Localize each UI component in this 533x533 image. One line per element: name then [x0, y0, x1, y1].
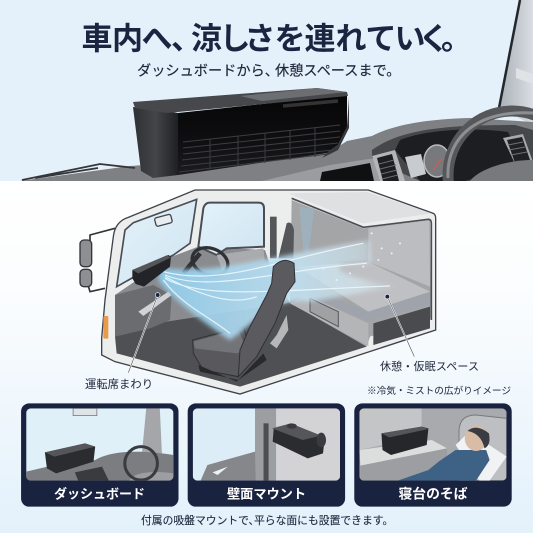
- cooler device: [132, 255, 171, 287]
- floor: [115, 303, 367, 387]
- label: driver area: 運転席まわり: [85, 378, 153, 391]
- footer note: 平らな面にも設置できます。: [254, 514, 393, 527]
- seat cushion and base: [193, 315, 288, 382]
- mist particles: [322, 232, 401, 281]
- mattress: [297, 262, 430, 345]
- air flow: [158, 240, 397, 340]
- steering wheel: [183, 243, 232, 280]
- side window: [198, 203, 264, 255]
- door interior: [115, 247, 290, 337]
- windshield: [117, 199, 197, 287]
- card: wall mount: [188, 403, 345, 507]
- label: rest space: 休憩・仮眠スペース: [380, 359, 479, 373]
- placement cards: [21, 403, 512, 507]
- seat backrest: [238, 260, 295, 377]
- sleeper back wall: [290, 198, 431, 347]
- a-pillar: [499, 0, 533, 125]
- steering wheel: [442, 106, 533, 181]
- door lower panel: [217, 248, 265, 273]
- note: ※冷気・ミストの広がりイメージ: [367, 384, 511, 397]
- title: 車内へ、涼しさを連れていく。: [82, 22, 472, 56]
- card: dashboard: [21, 403, 178, 507]
- dashboard: [20, 118, 533, 181]
- card label: bedside: 寝台のそば: [398, 486, 468, 502]
- lower background: [0, 181, 533, 533]
- subtitle: 休憩スペースまで。: [275, 62, 400, 80]
- card: bedside: [354, 403, 512, 507]
- card label: dashboard: ダッシュボード: [54, 486, 145, 502]
- lower dash console: [115, 285, 172, 337]
- hero photo panel: [0, 0, 533, 181]
- cab shell: [102, 190, 436, 394]
- mirrors: [80, 228, 115, 292]
- belt and passenger seat: [270, 217, 294, 258]
- leader: driver area: [128, 293, 160, 373]
- card label: wall mount: 壁面マウント: [227, 486, 306, 502]
- footer note: 付属の吸盤マウントで、: [141, 515, 259, 527]
- wipers: [22, 164, 135, 180]
- cab illustration: [80, 190, 436, 394]
- roof panel: [288, 192, 432, 223]
- curtain: [299, 207, 314, 252]
- subtitle: ダッシュボードから、: [137, 64, 279, 80]
- storage drawer: [290, 295, 368, 346]
- leader: sleeper: [385, 294, 414, 357]
- air streaks: [163, 243, 390, 333]
- rear-view mirror: [154, 214, 173, 227]
- orange marker: [103, 316, 108, 339]
- cooler device: [133, 88, 349, 178]
